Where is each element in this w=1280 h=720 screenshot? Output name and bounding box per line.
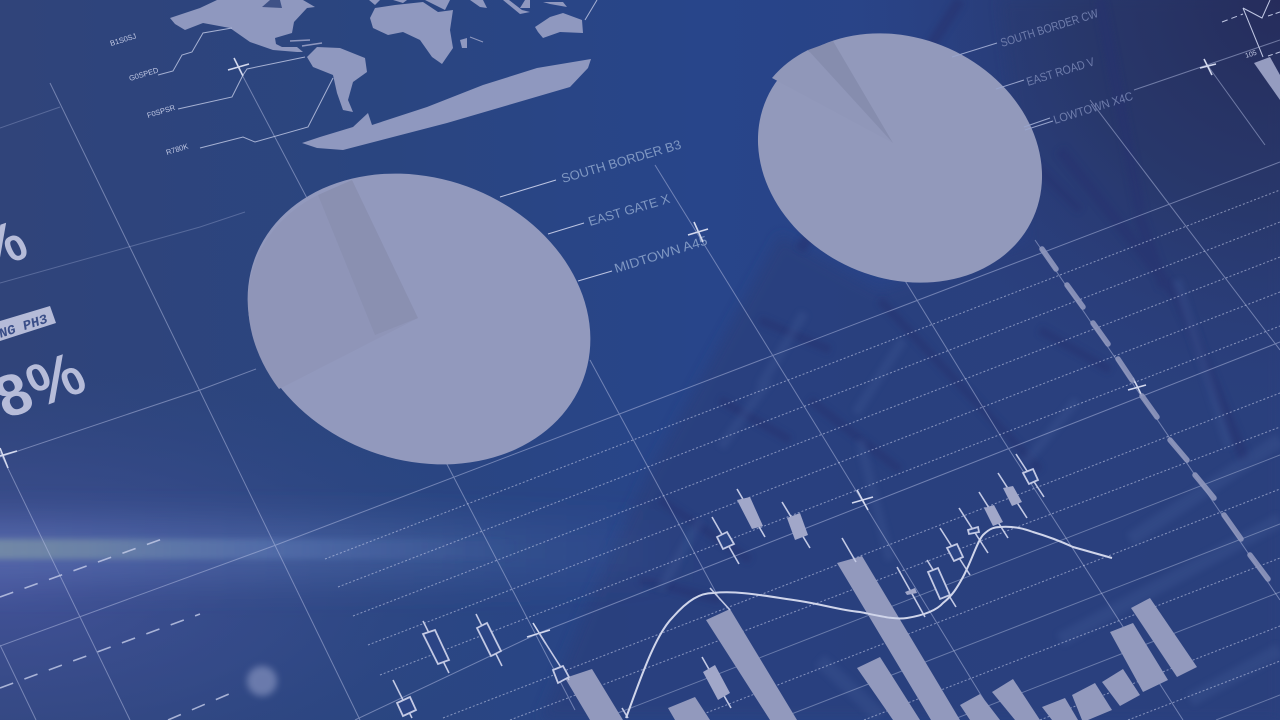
candlesticks: filled xyxy=(703,486,1022,700)
map: arabia xyxy=(425,0,450,10)
pie slice: inner dark wedge xyxy=(318,180,418,335)
map: hudson bay xyxy=(262,0,282,8)
map leader lines xyxy=(158,0,597,148)
map code labels: R780K xyxy=(165,142,189,157)
map: madagascar xyxy=(460,38,467,48)
pie slice: small light wedge xyxy=(772,50,893,143)
map: south america xyxy=(307,47,367,112)
pie labels: large xyxy=(500,137,709,281)
bar chart xyxy=(565,556,1197,720)
crosshair markers xyxy=(0,58,1216,644)
pie chart: large xyxy=(206,127,632,511)
pie labels: small: LOWTOWN X4C xyxy=(1052,89,1135,127)
map code labels: B1S0SJ xyxy=(109,31,138,48)
map code labels xyxy=(109,31,189,157)
map: south east asia xyxy=(503,0,530,14)
candlestick wicks xyxy=(393,454,1044,718)
map: europe fragment east xyxy=(393,0,407,3)
tower silhouette xyxy=(540,0,1280,720)
map: india xyxy=(470,0,487,8)
world map xyxy=(170,0,591,150)
map: indonesia xyxy=(520,0,530,8)
map: north america xyxy=(170,0,315,52)
top right bar xyxy=(1254,57,1280,100)
pie labels: large: MIDTOWN A45 xyxy=(612,233,709,276)
dotted chart gridlines xyxy=(325,190,1280,720)
trend curve xyxy=(626,527,1112,718)
map: europe fragments xyxy=(369,0,380,5)
lens streak xyxy=(0,520,700,582)
dashed trend lines, lower left xyxy=(0,538,236,720)
map: antarctica xyxy=(302,59,591,150)
map code labels: F0SPSR xyxy=(146,103,177,120)
pie labels: large: SOUTH BORDER B3 xyxy=(559,137,683,186)
pie labels: small: SOUTH BORDER CW xyxy=(999,6,1100,50)
pie labels: small xyxy=(952,6,1135,130)
lens flare spot xyxy=(247,666,277,696)
candlesticks: hollow xyxy=(397,469,1038,716)
pie slice: small dark wedge xyxy=(808,41,893,143)
pie chart: small xyxy=(718,0,1082,327)
map: pacific islands xyxy=(543,2,567,7)
map: africa xyxy=(370,2,453,64)
map: australia xyxy=(535,13,583,38)
map code labels: G0SPED xyxy=(128,65,160,83)
top right mini chart: 105 xyxy=(1244,50,1258,60)
map: caribbean xyxy=(290,40,322,46)
pie labels: large: EAST GATE X xyxy=(586,191,672,229)
map: madagascar marker line xyxy=(470,37,483,42)
pie labels: small: EAST ROAD V xyxy=(1025,55,1096,89)
thick dashed line, right xyxy=(1042,249,1268,579)
pie slice: left wedge xyxy=(248,195,418,389)
solid chart gridlines xyxy=(600,455,1280,720)
top right mini chart xyxy=(1222,0,1280,100)
faint upper grid xyxy=(0,107,245,283)
